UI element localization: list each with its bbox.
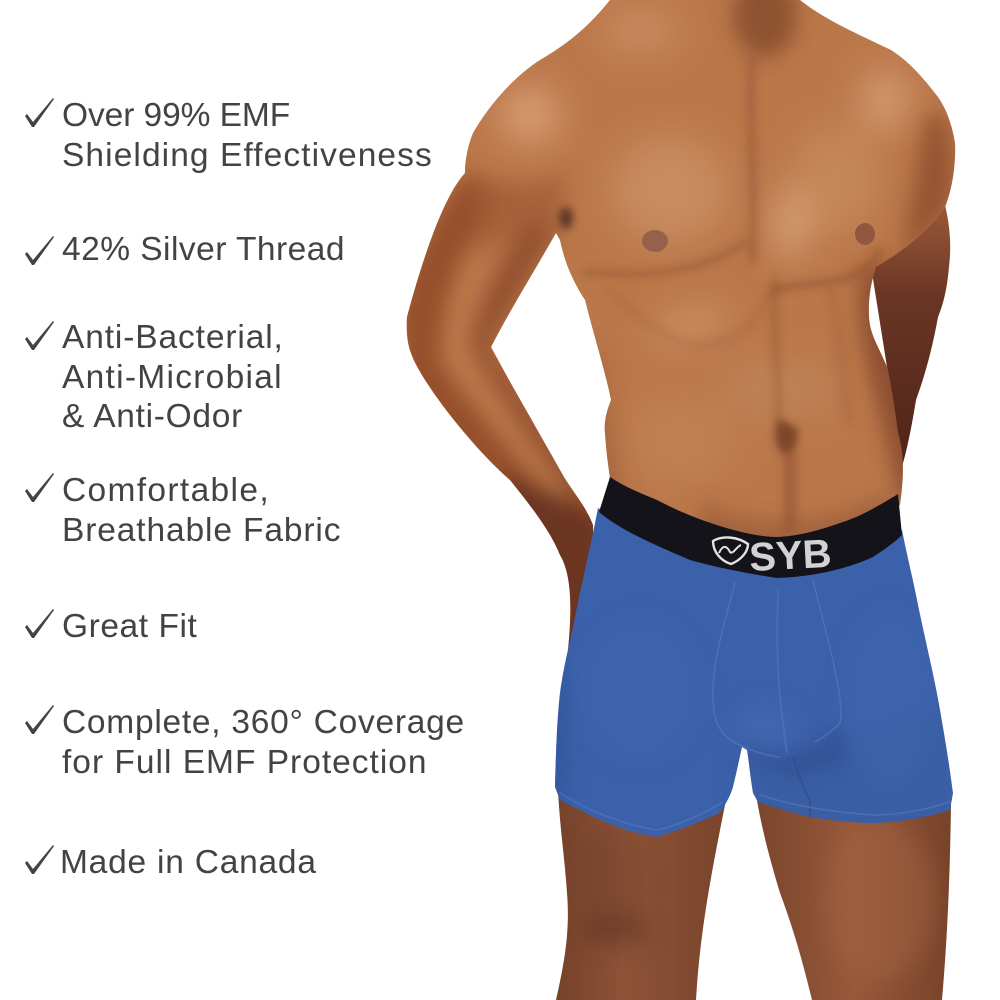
icon: check mark: [25, 845, 54, 874]
arm shading: [406, 166, 594, 650]
feature text: [62, 704, 465, 780]
icon: check mark: [25, 236, 54, 265]
icon: check mark: [25, 473, 54, 502]
icon: check mark: [25, 98, 54, 127]
feature text: Anti-Bacterial,: [62, 319, 284, 356]
back arm: [870, 205, 950, 467]
feature text: 42% Silver Thread: [62, 231, 345, 268]
feature: Great Fit: [25, 608, 197, 645]
feature text: Comfortable,: [62, 472, 270, 509]
pouch seams and stitching: [560, 580, 950, 830]
feature text: Complete, 360° Coverage: [62, 704, 465, 741]
armpit: [559, 207, 573, 229]
icon: check mark: [25, 609, 54, 638]
feature text: [62, 97, 433, 174]
feature text: & Anti-Odor: [62, 398, 243, 435]
feature text: Anti-Microbial: [62, 358, 283, 396]
feature: Made in Canada: [25, 844, 317, 881]
feature text: Great Fit: [62, 608, 197, 645]
feature text: Made in Canada: [60, 844, 317, 881]
feature text: for Full EMF Protection: [62, 744, 428, 780]
waistband: [599, 477, 902, 578]
torso and front arm: [400, 0, 960, 700]
icon: check mark: [25, 321, 54, 350]
feature: 42% Silver Thread: [25, 231, 345, 268]
highlights: [500, 5, 910, 485]
figure: man wearing blue SYB boxer briefs: [406, 0, 956, 1000]
boxer briefs: [555, 477, 953, 837]
navel: [775, 418, 798, 455]
feature text: [62, 472, 341, 548]
logo wordmark: SYB: [748, 532, 833, 580]
muscle creases: [585, 60, 880, 525]
feature text: Breathable Fabric: [62, 512, 341, 548]
icon: check mark: [25, 705, 54, 734]
legs: [556, 795, 951, 1000]
feature: Comfortable, Breathable Fabric: [25, 472, 341, 548]
nipples: [642, 230, 668, 252]
neck and torso shadows: [585, 0, 954, 560]
feature: Complete, 360° Coverage for Full EMF Protection: [25, 704, 465, 780]
feature text: Shielding Effectiveness: [62, 136, 433, 174]
feature: Anti-Bacterial, Anti-Microbial & Anti-Odor: [25, 319, 284, 435]
feature text: [62, 319, 284, 435]
logo shield icon: [713, 537, 748, 564]
feature text: Over 99% EMF: [62, 97, 290, 134]
fabric shading: [555, 640, 950, 800]
feature: Over 99% EMF Shielding Effectiveness: [25, 97, 433, 174]
